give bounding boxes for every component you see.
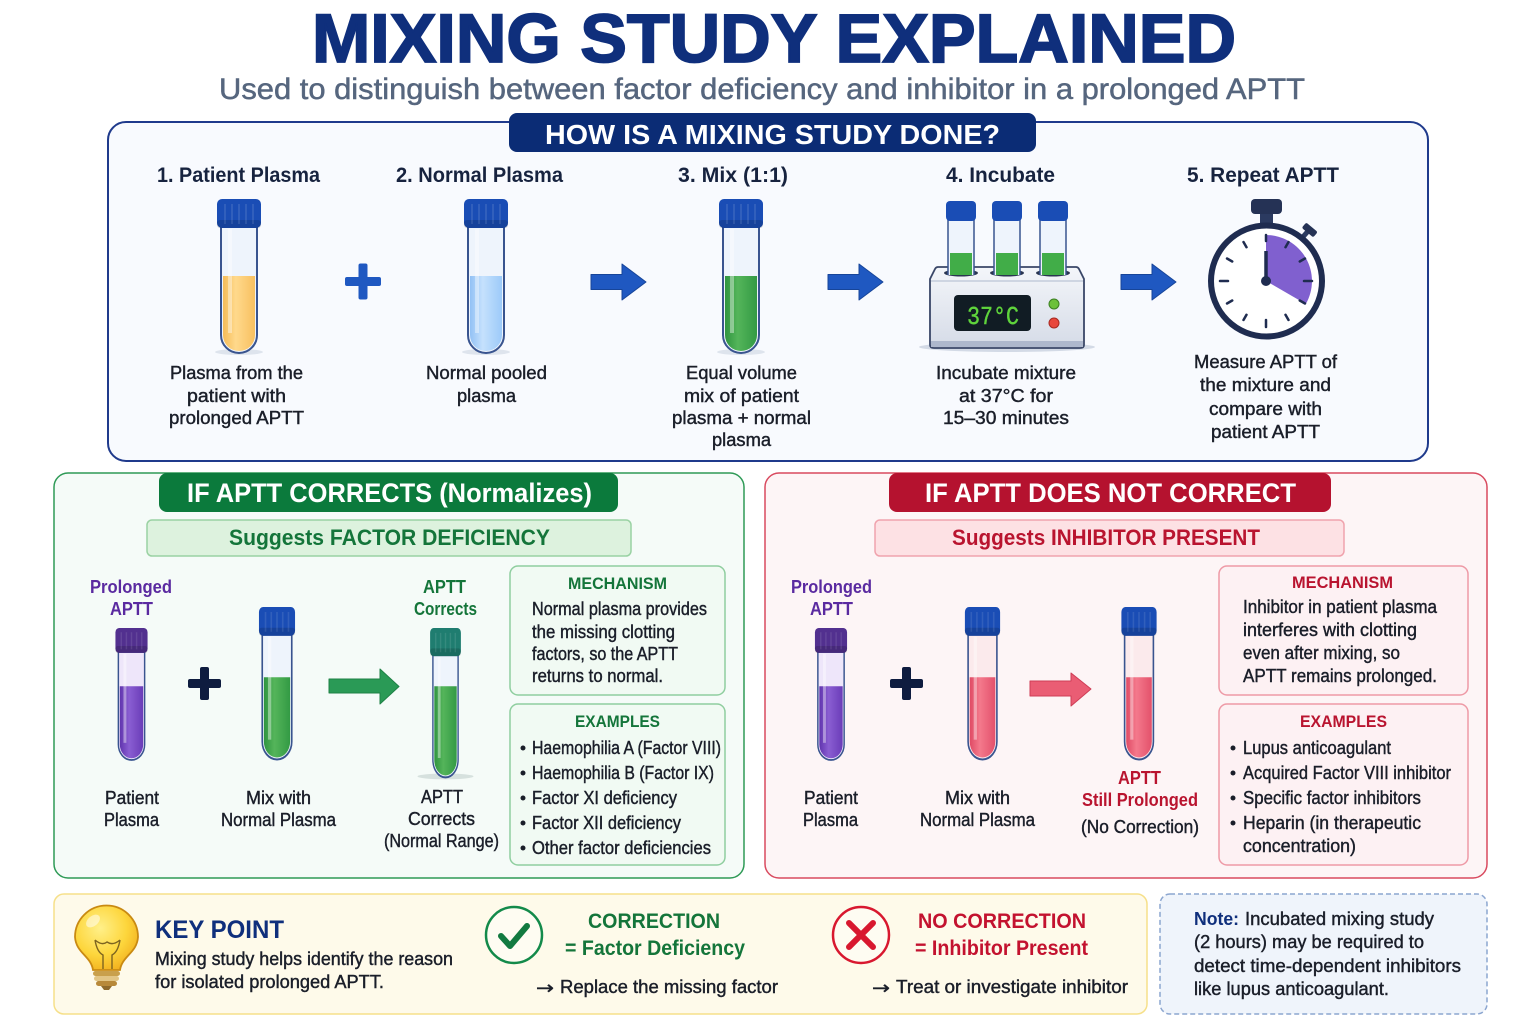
panel: note bbox=[1160, 894, 1487, 1014]
step 3: mix: 3. Mix (1:1) bbox=[678, 164, 788, 187]
arrow bbox=[1030, 673, 1091, 706]
step 3: mix: Equal volume bbox=[686, 363, 797, 383]
icon: blue plasma tube bbox=[464, 199, 508, 353]
icon: still prolonged tube bbox=[1121, 607, 1157, 759]
icon: red tube bbox=[965, 607, 1000, 759]
step 4: incubate: 4. Incubate bbox=[946, 164, 1055, 187]
icon: plus bbox=[188, 667, 221, 700]
label: prolonged aptt: APTT bbox=[110, 599, 153, 619]
step 2: normal plasma: 2. Normal Plasma bbox=[396, 164, 563, 187]
box: examples: Specific factor inhibitors bbox=[1243, 788, 1421, 808]
subtitle: Used to distinguish between factor deficiency and inhibitor in a prolonged APTT bbox=[219, 73, 1305, 106]
icon: green mixed tube bbox=[719, 199, 763, 353]
box: examples: Factor XI deficiency bbox=[532, 788, 677, 808]
step 1: patient plasma: patient with bbox=[187, 386, 286, 406]
icon: light bulb bbox=[75, 906, 138, 990]
text: correction: CORRECTION bbox=[588, 910, 720, 933]
text: no correction: → bbox=[872, 978, 890, 999]
label: prolonged aptt bbox=[90, 577, 172, 619]
step 3: mix: plasma + normal bbox=[672, 408, 811, 428]
box: examples: Factor XII deficiency bbox=[532, 813, 681, 833]
text: key point: Mixing study helps identify the reason bbox=[155, 949, 453, 969]
icon: check bbox=[486, 907, 542, 963]
step 1: patient plasma bbox=[157, 164, 320, 428]
caption: aptt corrects normal range: APTT bbox=[421, 787, 463, 807]
box: mechanism: APTT remains prolonged. bbox=[1243, 666, 1437, 686]
step 5: repeat aptt bbox=[1187, 164, 1339, 442]
text: correction: = Factor Deficiency bbox=[565, 937, 745, 960]
caption: patient plasma: Plasma bbox=[803, 810, 859, 830]
icon: corrected tube bbox=[418, 628, 474, 779]
label: aptt corrects: APTT bbox=[423, 577, 466, 597]
caption: aptt corrects normal range bbox=[384, 787, 499, 851]
box: examples: EXAMPLES bbox=[1300, 712, 1387, 731]
caption: mix with normal plasma bbox=[221, 788, 337, 830]
panel: aptt corrects bbox=[54, 473, 744, 878]
caption: aptt corrects normal range: Corrects bbox=[408, 809, 475, 829]
caption: aptt still prolonged: (No Correction) bbox=[1081, 817, 1199, 837]
subheading: inhibitor present bbox=[875, 520, 1344, 556]
box: examples bbox=[510, 704, 725, 865]
panel heading bbox=[509, 113, 1036, 152]
box: examples: Haemophilia B (Factor IX) bbox=[532, 763, 714, 783]
arrow bbox=[591, 264, 646, 300]
step 1: patient plasma: prolonged APTT bbox=[169, 408, 304, 428]
icon: purple tube bbox=[115, 628, 148, 760]
step 3: mix: plasma bbox=[712, 430, 772, 450]
text: no correction: Treat or investigate inhibitor bbox=[896, 977, 1128, 997]
step 3: mix: mix of patient bbox=[684, 386, 799, 406]
caption: patient plasma bbox=[104, 788, 160, 830]
panel: note: Incubated mixing study bbox=[1245, 909, 1434, 929]
step 2: normal plasma: plasma bbox=[457, 386, 517, 406]
icon: plus bbox=[345, 264, 381, 300]
label: prolonged aptt: Prolonged bbox=[791, 577, 872, 597]
caption: aptt still prolonged: APTT bbox=[1118, 768, 1161, 788]
caption: mix with normal plasma: Normal Plasma bbox=[920, 810, 1036, 830]
label: prolonged aptt bbox=[791, 577, 872, 619]
caption: patient plasma: Patient bbox=[804, 788, 858, 808]
caption: aptt corrects normal range: (Normal Range) bbox=[384, 831, 499, 851]
box: mechanism: Normal plasma provides bbox=[532, 599, 707, 619]
step 5: repeat aptt: 5. Repeat APTT bbox=[1187, 164, 1339, 187]
subheading: factor deficiency: Suggests FACTOR DEFICIENCY bbox=[229, 525, 550, 550]
text: correction: → bbox=[536, 978, 554, 999]
title: MIXING STUDY EXPLAINED bbox=[312, 0, 1236, 77]
icon: purple tube bbox=[815, 628, 847, 760]
label: prolonged aptt: Prolonged bbox=[90, 577, 172, 597]
arrow bbox=[1121, 264, 1176, 300]
step 1: patient plasma: 1. Patient Plasma bbox=[157, 164, 320, 187]
panel heading: HOW IS A MIXING STUDY DONE? bbox=[545, 119, 1000, 150]
panel: note: Note: bbox=[1194, 909, 1239, 929]
box: mechanism: Inhibitor in patient plasma bbox=[1243, 597, 1438, 617]
text: no correction bbox=[872, 910, 1128, 999]
box: examples: Haemophilia A (Factor VIII) bbox=[532, 738, 721, 758]
step 4: incubate bbox=[919, 164, 1095, 428]
icon: incubator: 37°C bbox=[967, 302, 1019, 332]
caption: mix with normal plasma: Normal Plasma bbox=[221, 810, 337, 830]
box: examples: concentration) bbox=[1243, 836, 1356, 856]
step 2: normal plasma: Normal pooled bbox=[426, 363, 547, 383]
icon: green tube bbox=[259, 607, 295, 759]
red panel heading: IF APTT DOES NOT CORRECT bbox=[925, 478, 1296, 508]
box: mechanism: even after mixing, so bbox=[1243, 643, 1400, 663]
box: examples: Other factor deficiencies bbox=[532, 838, 711, 858]
box: examples: Lupus anticoagulant bbox=[1243, 738, 1391, 758]
text: key point: KEY POINT bbox=[155, 916, 284, 944]
step 2: normal plasma bbox=[396, 164, 563, 406]
text: correction bbox=[536, 910, 778, 999]
panel: note: (2 hours) may be required to bbox=[1194, 932, 1424, 952]
box: examples: EXAMPLES bbox=[575, 712, 660, 731]
step 3: mix bbox=[672, 164, 811, 450]
text: correction: Replace the missing factor bbox=[560, 977, 778, 997]
text: key point bbox=[155, 916, 453, 992]
arrow bbox=[828, 264, 883, 300]
caption: mix with normal plasma: Mix with bbox=[945, 788, 1010, 808]
step 5: repeat aptt: patient APTT bbox=[1211, 422, 1320, 442]
subheading: factor deficiency bbox=[147, 520, 631, 556]
caption: mix with normal plasma bbox=[920, 788, 1036, 830]
step 5: repeat aptt: the mixture and bbox=[1200, 375, 1331, 395]
panel: how is a mixing study done bbox=[108, 113, 1428, 461]
step 4: incubate: at 37°C for bbox=[959, 386, 1053, 406]
text: key point: for isolated prolonged APTT. bbox=[155, 972, 384, 992]
box: examples bbox=[1219, 704, 1468, 865]
text: no correction: NO CORRECTION bbox=[918, 910, 1086, 933]
caption: aptt still prolonged bbox=[1081, 768, 1199, 837]
icon: stopwatch bbox=[1211, 199, 1322, 336]
label: aptt corrects bbox=[414, 577, 477, 619]
step 4: incubate: 15–30 minutes bbox=[943, 408, 1069, 428]
label: prolonged aptt: APTT bbox=[810, 599, 853, 619]
box: mechanism bbox=[1219, 566, 1468, 695]
box: mechanism: interferes with clotting bbox=[1243, 620, 1417, 640]
step 5: repeat aptt: Measure APTT of bbox=[1194, 352, 1338, 372]
red panel heading bbox=[889, 473, 1331, 512]
text: no correction: = Inhibitor Present bbox=[915, 937, 1088, 960]
box: examples: Acquired Factor VIII inhibitor bbox=[1243, 763, 1451, 783]
box: mechanism: returns to normal. bbox=[532, 666, 663, 686]
box: mechanism: MECHANISM bbox=[568, 574, 667, 593]
caption: patient plasma bbox=[803, 788, 859, 830]
caption: patient plasma: Plasma bbox=[104, 810, 160, 830]
caption: aptt still prolonged: Still Prolonged bbox=[1082, 790, 1198, 810]
box: mechanism: the missing clotting bbox=[532, 622, 675, 642]
caption: mix with normal plasma: Mix with bbox=[246, 788, 311, 808]
arrow bbox=[329, 669, 399, 704]
icon: incubator bbox=[919, 201, 1095, 352]
icon: plus bbox=[890, 667, 923, 700]
step 5: repeat aptt: compare with bbox=[1209, 399, 1322, 419]
panel: aptt does not correct bbox=[765, 473, 1487, 878]
box: examples: Heparin (in therapeutic bbox=[1243, 813, 1421, 833]
box: mechanism: factors, so the APTT bbox=[532, 644, 678, 664]
box: mechanism bbox=[510, 566, 725, 695]
subheading: inhibitor present: Suggests INHIBITOR PRESENT bbox=[952, 525, 1261, 550]
label: aptt corrects: Corrects bbox=[414, 599, 477, 619]
caption: patient plasma: Patient bbox=[105, 788, 159, 808]
icon: yellow plasma tube bbox=[217, 199, 261, 353]
step 4: incubate: Incubate mixture bbox=[936, 363, 1076, 383]
box: mechanism: MECHANISM bbox=[1292, 573, 1393, 592]
icon: cross bbox=[833, 907, 889, 963]
step 1: patient plasma: Plasma from the bbox=[170, 363, 303, 383]
panel: key point bbox=[54, 894, 1147, 1014]
green panel heading: IF APTT CORRECTS (Normalizes) bbox=[187, 478, 592, 508]
panel: note: detect time-dependent inhibitors bbox=[1194, 956, 1461, 976]
panel: note: like lupus anticoagulant. bbox=[1194, 979, 1389, 999]
